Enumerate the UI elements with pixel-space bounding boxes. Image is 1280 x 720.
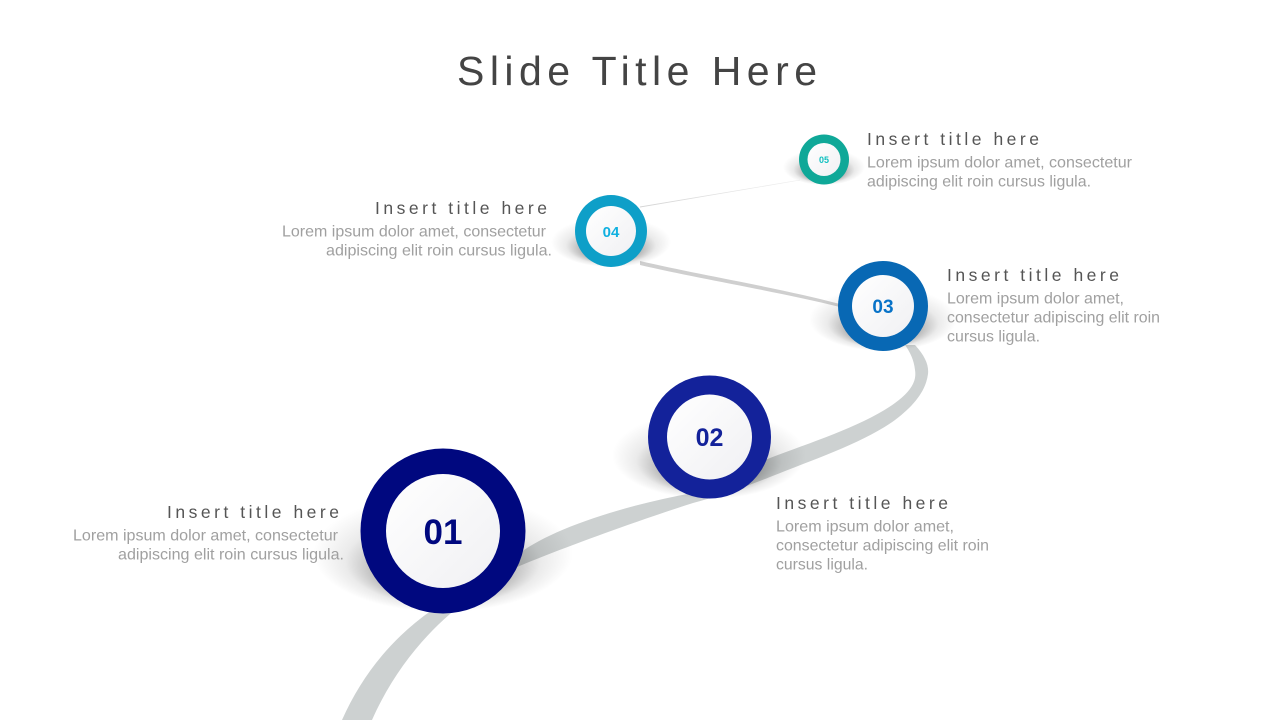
text block 03: cursus ligula. bbox=[947, 328, 1040, 346]
text block 01 bbox=[73, 502, 344, 564]
text block 02: consectetur adipiscing elit roin bbox=[776, 538, 989, 554]
text block 01: Lorem ipsum dolor amet, consectetur bbox=[73, 528, 339, 544]
text block 02: cursus ligula. bbox=[776, 556, 868, 574]
node 02 bbox=[612, 376, 806, 499]
title: Slide Title Here bbox=[457, 48, 817, 94]
text block 01: adipiscing elit roin cursus ligula. bbox=[118, 546, 344, 564]
node 05 bbox=[783, 134, 865, 185]
road path bbox=[342, 180, 928, 720]
text block 05: adipiscing elit roin cursus ligula. bbox=[867, 174, 1091, 190]
text block 05: Insert title here bbox=[867, 129, 1039, 149]
text block 02: Insert title here bbox=[776, 493, 948, 513]
node 02: 02 bbox=[696, 424, 723, 452]
text block 03: Insert title here bbox=[947, 265, 1119, 285]
node 03: 03 bbox=[872, 297, 894, 318]
text block 04: adipiscing elit roin cursus ligula. bbox=[326, 242, 552, 260]
node 05: 05 bbox=[819, 155, 829, 165]
text block 03: consectetur adipiscing elit roin bbox=[947, 310, 1160, 326]
text block 04: Insert title here bbox=[375, 198, 547, 218]
text block 02 bbox=[776, 493, 989, 574]
node 01 bbox=[313, 448, 573, 614]
text block 04: Lorem ipsum dolor amet, consectetur bbox=[282, 224, 547, 240]
text block 05: Lorem ipsum dolor amet, consectetur bbox=[867, 154, 1133, 172]
text block 05 bbox=[867, 129, 1133, 190]
node 04 bbox=[551, 195, 671, 267]
text block 03: Lorem ipsum dolor amet, bbox=[947, 290, 1124, 308]
text block 03 bbox=[947, 265, 1160, 346]
node 01: 01 bbox=[424, 513, 462, 552]
text block 02: Lorem ipsum dolor amet, bbox=[776, 518, 954, 536]
text block 01: Insert title here bbox=[167, 502, 339, 522]
text block 04 bbox=[282, 198, 552, 260]
node 04: 04 bbox=[603, 224, 620, 241]
node 03 bbox=[809, 261, 957, 351]
